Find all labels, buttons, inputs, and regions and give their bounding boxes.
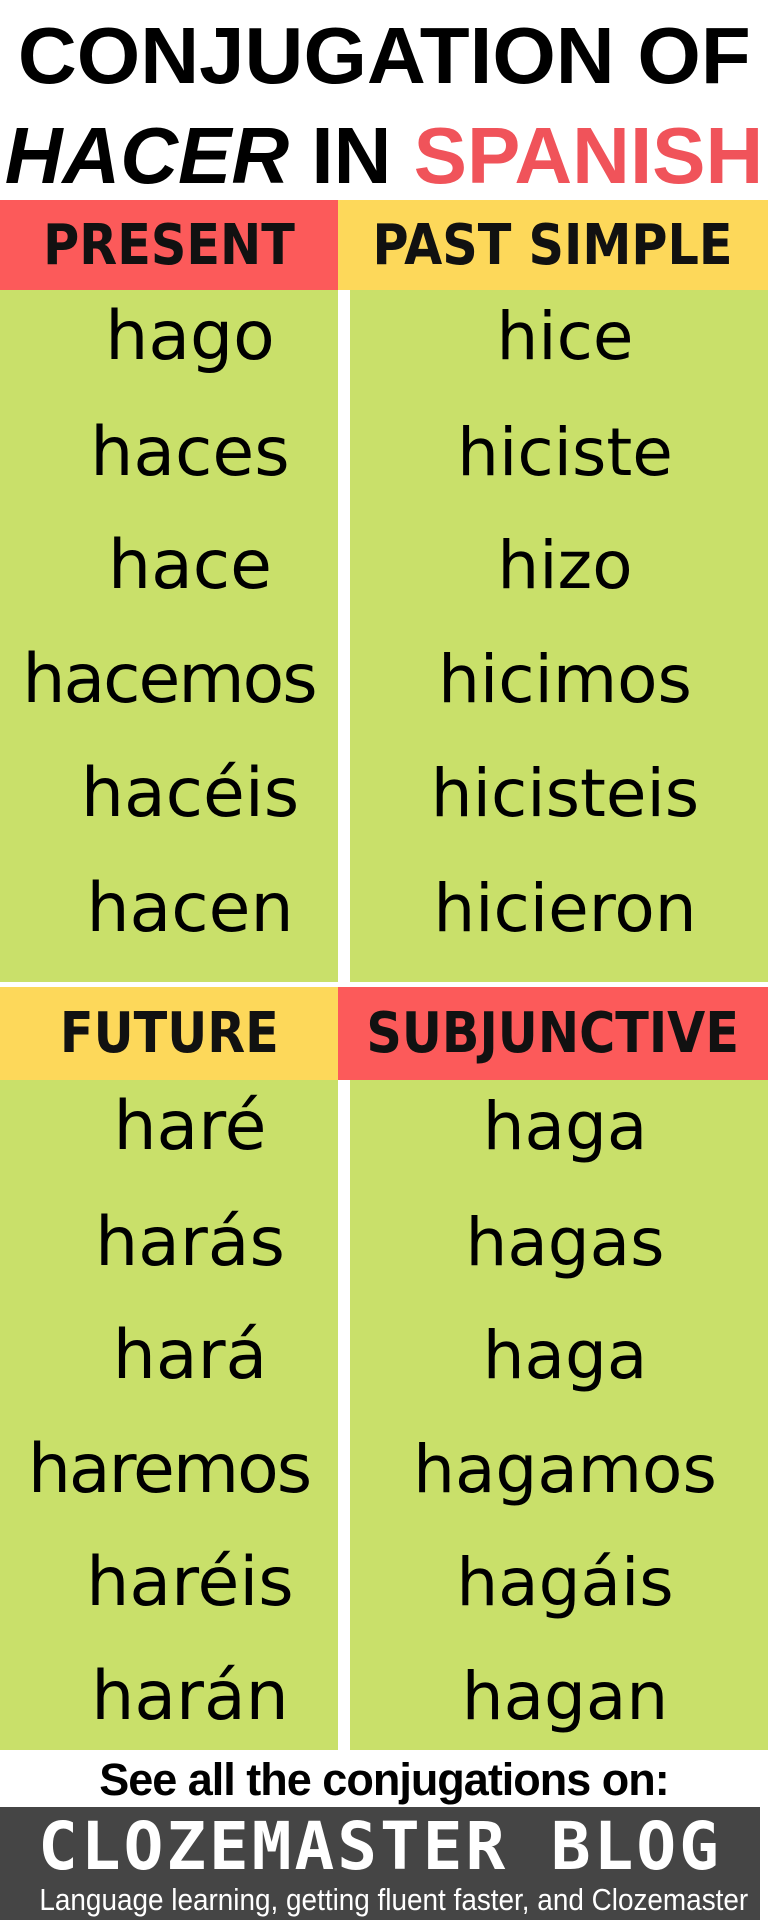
panel: present/past forms: hiciste	[457, 414, 673, 491]
panel: present/past forms: hizo	[497, 527, 633, 604]
panel: future/subjunctive forms: haga	[483, 1317, 647, 1394]
panel: future/subjunctive forms: haga	[483, 1088, 647, 1165]
panel: future/subjunctive forms: hagas	[466, 1204, 664, 1281]
header: future: FUTURE	[60, 1001, 278, 1066]
panel: future/subjunctive forms	[0, 1080, 768, 1750]
title: CONJUGATION OF	[18, 11, 750, 100]
panel: present/past forms: hace	[108, 526, 272, 605]
panel: present/past forms: hicimos	[438, 641, 692, 718]
footer banner: clozemaster blog: CLOZEMASTER BLOG	[38, 1808, 722, 1885]
header: past simple: PAST SIMPLE	[373, 212, 733, 278]
panel: present/past forms: hacen	[86, 869, 294, 948]
panel: future/subjunctive forms: hagamos	[413, 1431, 717, 1508]
footer text: See all the conjugations on:	[99, 1754, 669, 1805]
panel: future/subjunctive forms: hará	[113, 1316, 267, 1395]
title: HACER IN SPANISH	[5, 111, 763, 200]
panel: present/past forms: hacéis	[81, 754, 299, 833]
panel: present/past forms: hicisteis	[431, 755, 699, 832]
footer banner: clozemaster blog	[0, 1807, 760, 1920]
footer banner: clozemaster blog: Language learning, getting fluent faster, and Clozemaster	[39, 1882, 748, 1917]
title	[5, 11, 763, 200]
panel: present/past forms: hice	[496, 298, 634, 375]
panel: future/subjunctive forms: hagáis	[456, 1544, 674, 1621]
panel: future/subjunctive forms: haréis	[86, 1543, 294, 1622]
header: past simple	[338, 200, 768, 290]
header: present: PRESENT	[43, 212, 295, 278]
panel: present/past forms: hacemos	[22, 640, 316, 719]
panel: present/past forms	[0, 290, 768, 982]
panel: future/subjunctive forms: harás	[95, 1203, 285, 1282]
header: subjunctive	[338, 987, 768, 1080]
header: future	[0, 987, 338, 1080]
header: subjunctive: SUBJUNCTIVE	[367, 1001, 739, 1066]
panel: present/past forms: hago	[105, 297, 275, 376]
panel: future/subjunctive forms: hagan	[462, 1658, 668, 1735]
panel: future/subjunctive forms: haremos	[28, 1430, 310, 1509]
panel: present/past forms: haces	[90, 413, 290, 492]
panel: present/past forms: hicieron	[433, 870, 697, 947]
panel: future/subjunctive forms: haré	[113, 1087, 267, 1166]
header: present	[0, 200, 338, 290]
panel: future/subjunctive forms: harán	[91, 1657, 289, 1736]
